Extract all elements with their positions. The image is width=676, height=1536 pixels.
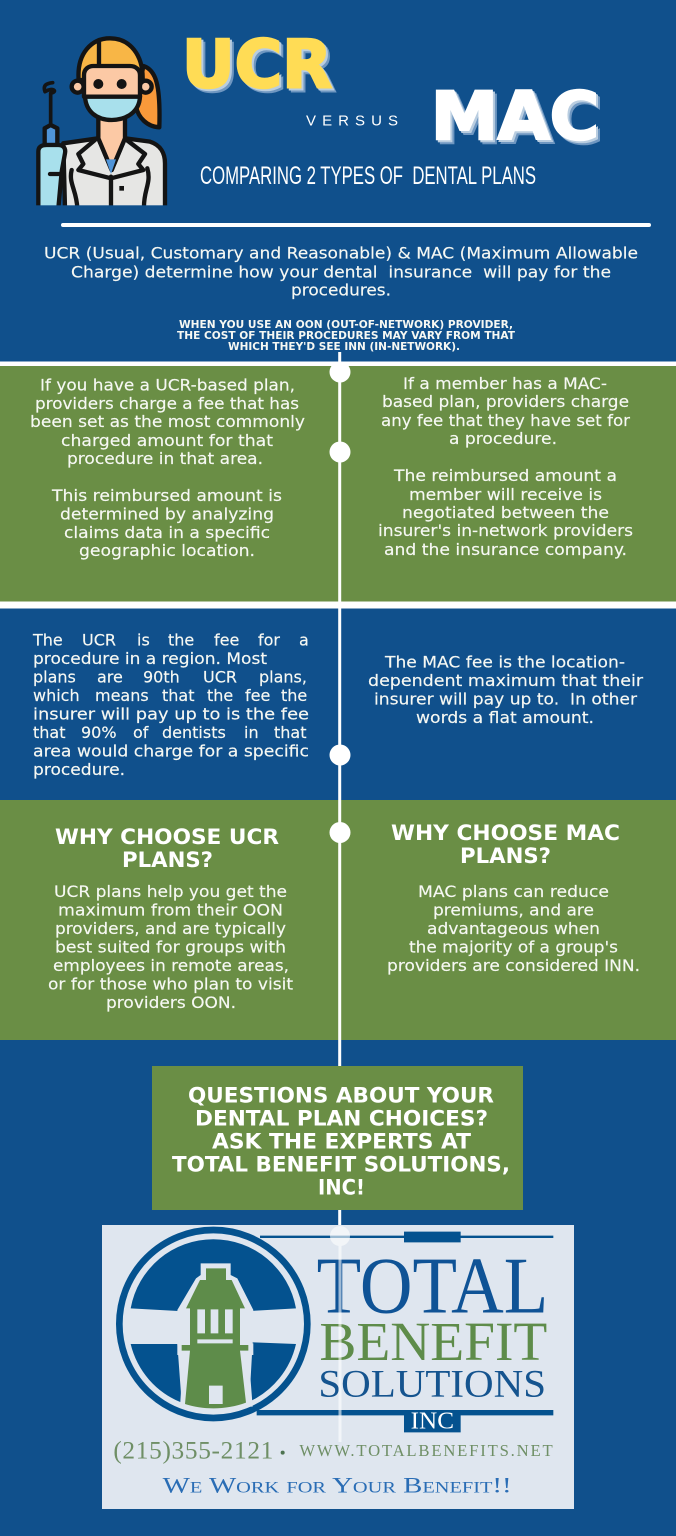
text block: UCR fee definition: procedure. xyxy=(33,760,125,779)
text block: UCR fee definition: 90th xyxy=(143,668,180,686)
text block: UCR fee definition: is xyxy=(137,630,150,650)
text block: intro xyxy=(44,244,638,300)
text block: MAC-based plan: a procedure. xyxy=(449,429,557,448)
callout: questions box: ASK THE EXPERTS AT xyxy=(212,1130,472,1154)
heading: why choose MAC: WHY CHOOSE MAC xyxy=(391,821,620,845)
text block: intro: UCR (Usual, Customary and Reasonable) & MAC (Maximum Allowable xyxy=(44,244,638,262)
text block: UCR reasons: best suited for groups with xyxy=(55,938,286,956)
title: versus: VERSUS xyxy=(306,112,398,130)
text block: UCR fee definition: are xyxy=(97,668,123,686)
divider rule xyxy=(61,223,651,227)
text block: UCR fee definition: fee xyxy=(214,630,239,650)
text block: MAC fee definition: words a flat amount. xyxy=(416,708,594,727)
text block: UCR fee definition: of xyxy=(133,723,149,742)
text block: UCR-based plan: This reimbursed amount is xyxy=(51,486,282,505)
panel: UCR explanation band xyxy=(0,362,676,608)
text block: out-of-network note xyxy=(177,318,515,353)
text block: MAC-based plan xyxy=(378,374,633,559)
text block: UCR fee definition: that xyxy=(33,723,66,742)
callout: questions box xyxy=(152,1066,523,1210)
icon: dentist with mask xyxy=(33,38,170,212)
text block: MAC reasons: the majority of a group's xyxy=(409,938,618,956)
text block: MAC reasons: providers are considered INN. xyxy=(387,956,640,975)
heading: why choose UCR xyxy=(55,825,279,872)
text block: UCR-based plan: charged amount for that xyxy=(61,431,273,450)
text block: UCR reasons: UCR plans help you get the xyxy=(54,882,287,901)
text block: UCR reasons: providers, and are typically xyxy=(55,919,286,938)
text block: MAC reasons: MAC plans can reduce xyxy=(418,882,609,901)
text block: MAC-based plan: If a member has a MAC- xyxy=(403,374,607,393)
logo contact line xyxy=(113,1436,553,1464)
text block: UCR-based plan: geographic location. xyxy=(79,541,255,560)
text block: MAC fee definition: The MAC fee is the location- xyxy=(384,652,625,672)
text block: intro: Charge) determine how your dental insurance will pay for the xyxy=(71,262,611,282)
text block: UCR-based plan: If you have a UCR-based plan, xyxy=(40,376,295,394)
text block: UCR fee definition: a xyxy=(299,630,309,650)
text block: MAC-based plan: insurer's in-network providers xyxy=(378,521,633,540)
text block: MAC fee definition: dependent maximum that their xyxy=(368,671,643,690)
text block: UCR fee definition: UCR xyxy=(82,630,116,650)
text block: UCR fee definition: for xyxy=(258,630,280,650)
heading: why choose UCR: PLANS? xyxy=(122,848,213,872)
logo contact line: (215)355-2121 xyxy=(113,1436,273,1464)
text block: UCR reasons: providers OON. xyxy=(106,993,236,1012)
text block: UCR reasons: employees in remote areas, xyxy=(53,956,289,975)
text block: MAC fee definition xyxy=(368,652,643,727)
text block: UCR-based plan: procedure in that area. xyxy=(67,449,263,468)
text block: MAC-based plan: The reimbursed amount a xyxy=(393,466,617,485)
timeline dots xyxy=(330,362,350,843)
logo wordmark: INC xyxy=(411,1408,454,1434)
text block: UCR fee definition: insurer will pay up to is the fee xyxy=(33,704,309,724)
text block: UCR fee definition: the xyxy=(207,686,233,705)
text block: UCR reasons: or for those who plan to visit xyxy=(48,974,293,994)
text block: UCR fee definition: the xyxy=(168,630,194,650)
logo rules xyxy=(257,1232,553,1432)
text block: UCR-based plan: been set as the most commonly xyxy=(30,412,305,431)
text block: UCR fee definition: means xyxy=(95,686,149,705)
title: UCR: UCR xyxy=(182,26,332,103)
text block: UCR fee definition: plans xyxy=(33,668,76,686)
text block: MAC-based plan: member will receive is xyxy=(409,485,602,504)
text block: UCR fee definition: 90% xyxy=(81,723,117,742)
text block: UCR fee definition: in xyxy=(244,723,259,742)
timeline line xyxy=(338,352,341,1232)
text block: UCR-based plan xyxy=(30,376,305,560)
logo wordmark: TOTAL xyxy=(317,1243,548,1331)
text block: UCR fee definition: UCR xyxy=(203,668,237,686)
callout: questions box: QUESTIONS ABOUT YOUR xyxy=(188,1084,494,1108)
text block: UCR fee definition: dentists xyxy=(162,723,226,742)
title: MAC: MAC xyxy=(431,78,599,155)
text block: UCR fee definition: that xyxy=(274,723,306,742)
text block: UCR fee definition xyxy=(32,630,309,779)
text block: MAC reasons: advantageous when xyxy=(427,919,600,938)
text block: MAC reasons xyxy=(387,882,640,975)
text block: UCR fee definition: the xyxy=(281,686,307,705)
icon: lighthouse emblem xyxy=(119,1230,307,1418)
text block: MAC-based plan: negotiated between the xyxy=(402,503,609,522)
timeline overlay on logo xyxy=(330,1226,350,1442)
logo contact line: WWW.TOTALBENEFITS.NET xyxy=(299,1441,553,1460)
text block: UCR fee definition: The xyxy=(32,630,63,650)
text block: out-of-network note: WHICH THEY'D SEE INN (IN-NETWORK). xyxy=(228,340,460,353)
text block: UCR-based plan: providers charge a fee that has xyxy=(35,394,299,413)
text block: MAC-based plan: any fee that they have set for xyxy=(381,411,630,430)
text block: MAC fee definition: insurer will pay up to. In other xyxy=(374,690,637,708)
text block: UCR fee definition: area would charge for a specific xyxy=(33,742,309,760)
text block: out-of-network note: WHEN YOU USE AN OON (OUT-OF-NETWORK) PROVIDER, xyxy=(179,318,513,331)
text block: intro: procedures. xyxy=(291,280,391,300)
heading: why choose UCR: WHY CHOOSE UCR xyxy=(55,825,279,849)
logo tagline: We Work for Your Benefit!! xyxy=(163,1472,512,1497)
text block: MAC reasons: premiums, and are xyxy=(433,900,594,920)
text block: UCR reasons xyxy=(48,882,293,1012)
text block: UCR fee definition: plans, xyxy=(259,668,307,686)
logo wordmark: BENEFIT xyxy=(319,1311,547,1372)
panel: why choose band xyxy=(0,800,676,1040)
text block: out-of-network note: THE COST OF THEIR PROCEDURES MAY VARY FROM THAT xyxy=(177,329,515,342)
heading: why choose MAC: PLANS? xyxy=(460,844,551,868)
text block: UCR fee definition: which xyxy=(33,686,80,705)
callout: questions box: TOTAL BENEFIT SOLUTIONS, xyxy=(172,1152,510,1176)
text block: MAC-based plan: based plan, providers charge xyxy=(382,392,629,411)
callout: questions box: DENTAL PLAN CHOICES? xyxy=(195,1106,488,1130)
text block: UCR fee definition: that xyxy=(162,686,194,705)
text block: UCR fee definition: procedure in a region. Most xyxy=(33,649,267,668)
text block: UCR-based plan: determined by analyzing xyxy=(60,504,274,524)
text block: UCR fee definition: fee xyxy=(245,686,270,705)
text block: MAC-based plan: and the insurance company. xyxy=(384,540,627,559)
text block: UCR reasons: maximum from their OON xyxy=(58,900,283,920)
logo wordmark: SOLUTIONS xyxy=(318,1362,546,1406)
heading: why choose MAC xyxy=(391,821,620,868)
panel: company logo card xyxy=(102,1225,574,1509)
callout: questions box: INC! xyxy=(318,1176,365,1200)
logo wordmark xyxy=(317,1243,548,1434)
text block: UCR-based plan: claims data in a specific xyxy=(64,523,270,542)
